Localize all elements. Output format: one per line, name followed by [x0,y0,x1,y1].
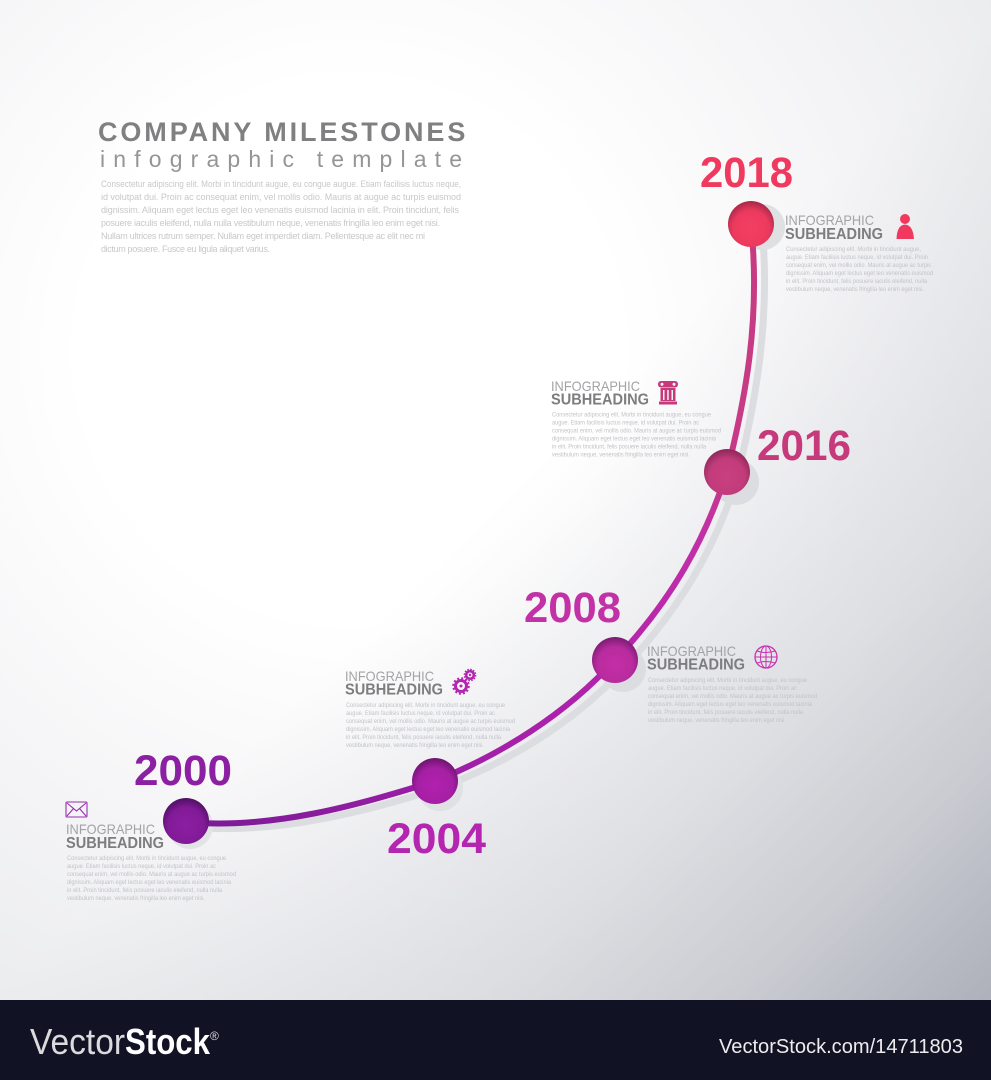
text block 2008: vestibulum neque, venenatis fringilla leo enim eget nisi. [648,717,786,724]
text block 2016: INFOGRAPHIC [551,378,640,394]
text block 2018: in elit. Proin tincidunt, felis posuere iaculis eleifend, nulla [786,278,927,285]
text block 2018: consequat enim, vel mollis odio. Mauris at augue ac turpis [786,262,932,269]
icon: column [658,381,678,404]
footer logo [30,1021,219,1062]
intro text block: id volutpat dui. Proin ac consequat enim, vel mollis odio. Mauris at augue ac turpis euismod [101,192,461,202]
intro text block [101,179,461,254]
text block 2016: Consectetur adipiscing elit. Morbi in tincidunt augue, eu congue [552,412,711,418]
text block 2008: in elit. Proin tincidunt, felis posuere iaculis eleifend, nulla nulla [648,709,803,716]
timeline curve [186,224,754,824]
icon: person [896,214,914,239]
text block 2018: dignissim. Aliquam eget lectus eget leo venenatis euismod [786,270,933,277]
text block 2000: in elit. Proin tincidunt, felis posuere iaculis eleifend, nulla nulla [67,887,222,894]
text block 2008 [647,643,817,724]
text block 2008: augue. Etiam facilisis luctus neque, id volutpat dui. Proin ac [648,685,798,692]
text block 2004: consequat enim, vel mollis odio. Mauris at augue ac turpis euismod [346,718,515,725]
text block 2008: INFOGRAPHIC [647,643,736,659]
intro text block: posuere iaculis eleifend, nulla nulla vestibulum neque, venenatis fringilla leo enim eget nisi. [101,218,440,228]
text block 2004: SUBHEADING [345,682,443,698]
text block 2000: INFOGRAPHIC [66,821,155,837]
milestone 2018 [700,149,793,247]
intro text block: Consectetur adipiscing elit. Morbi in tincidunt augue, eu congue augue. Etiam facilisis luctus neque, [101,179,461,189]
text block 2016: dignissim. Aliquam eget lectus eget leo venenatis euismod lacinia [552,436,716,442]
icon: envelope [66,802,87,817]
intro text block: dignissim. Aliquam eget lectus eget leo venenatis euismod lacinia in elit. Proin tincidunt, felis [101,205,460,215]
text block 2018: Consectetur adipiscing elit. Morbi in tincidunt augue, [786,246,921,253]
text block 2000: Consectetur adipiscing elit. Morbi in tincidunt augue, eu congue [67,855,226,862]
text block 2000: vestibulum neque, venenatis fringilla leo enim eget nisi. [67,895,205,902]
milestone 2004: 2004 [387,815,486,863]
text block 2018: SUBHEADING [785,226,883,243]
text block 2008: SUBHEADING [647,656,745,674]
text block 2018 [785,212,933,293]
footer url: VectorStock.com/14711803 [719,1036,963,1058]
footer bar [0,1000,991,1080]
text block 2016: consequat enim, vel mollis odio. Mauris at augue ac turpis euismod [552,428,721,434]
intro text block: dictum posuere. Fusce eu ligula aliquet varius. [101,244,270,254]
title: COMPANY MILESTONES [98,117,468,147]
icon: gears [453,669,476,694]
milestone 2000 [134,747,232,844]
text block 2004 [345,668,515,749]
text block 2000: SUBHEADING [66,835,164,852]
timeline shadow [167,204,785,849]
text block 2016: vestibulum neque, venenatis fringilla leo enim eget nisi. [552,452,690,458]
milestone 2000: 2000 [134,747,232,795]
text block 2016: augue. Etiam facilisis luctus neque, id volutpat dui. Proin ac [552,420,700,426]
milestone 2008 [524,584,638,683]
text block 2008: Consectetur adipiscing elit. Morbi in tincidunt augue, eu congue [648,677,807,684]
footer logo: Vector [30,1021,125,1062]
milestone 2008: 2008 [524,584,621,632]
text block 2004: INFOGRAPHIC [345,668,434,684]
milestone 2004 [387,758,486,863]
text block 2004: vestibulum neque, venenatis fringilla leo enim eget nisi. [346,742,484,749]
text block 2004: augue. Etiam facilisis luctus neque, id volutpat dui. Proin ac [346,710,496,717]
text block 2016: SUBHEADING [551,392,649,408]
text block 2004: Consectetur adipiscing elit. Morbi in tincidunt augue, eu congue [346,702,505,709]
text block 2004: dignissim. Aliquam eget lectus eget leo venenatis euismod lacinia [346,726,510,733]
milestone 2018: 2018 [700,149,793,197]
milestone 2016 [704,422,851,495]
title: infographic template [100,146,462,172]
text block 2008: dignissim. Aliquam eget lectus eget leo venenatis euismod lacinia [648,701,812,708]
text block 2000: dignissim. Aliquam eget lectus eget leo venenatis euismod lacinia [67,879,231,886]
text block 2018: augue. Etiam facilisis luctus neque, id volutpat dui. Proin [786,254,928,261]
text block 2000: augue. Etiam facilisis luctus neque, id volutpat dui. Proin ac [67,863,217,870]
text block 2000: consequat enim, vel mollis odio. Mauris at augue ac turpis euismod [67,871,236,878]
title [98,117,468,172]
text block 2000 [66,821,236,902]
text block 2008: consequat enim, vel mollis odio. Mauris at augue ac turpis euismod [648,693,817,700]
text block 2016 [551,378,721,458]
intro text block: Nullam ultrices rutrum semper. Nullam eget imperdiet diam. Pellentesque ac elit nec mi [101,231,425,241]
text block 2018: INFOGRAPHIC [785,212,874,228]
footer logo: Stock [125,1021,211,1062]
icon: globe [755,646,777,668]
milestone 2016: 2016 [757,422,851,470]
text block 2018: vestibulum neque, venenatis fringilla leo enim eget nisi. [786,286,924,293]
text block 2004: in elit. Proin tincidunt, felis posuere iaculis eleifend, nulla nulla [346,734,501,741]
text block 2016: in elit. Proin tincidunt, felis posuere iaculis eleifend, nulla nulla [552,444,706,450]
footer logo: ® [210,1029,219,1043]
